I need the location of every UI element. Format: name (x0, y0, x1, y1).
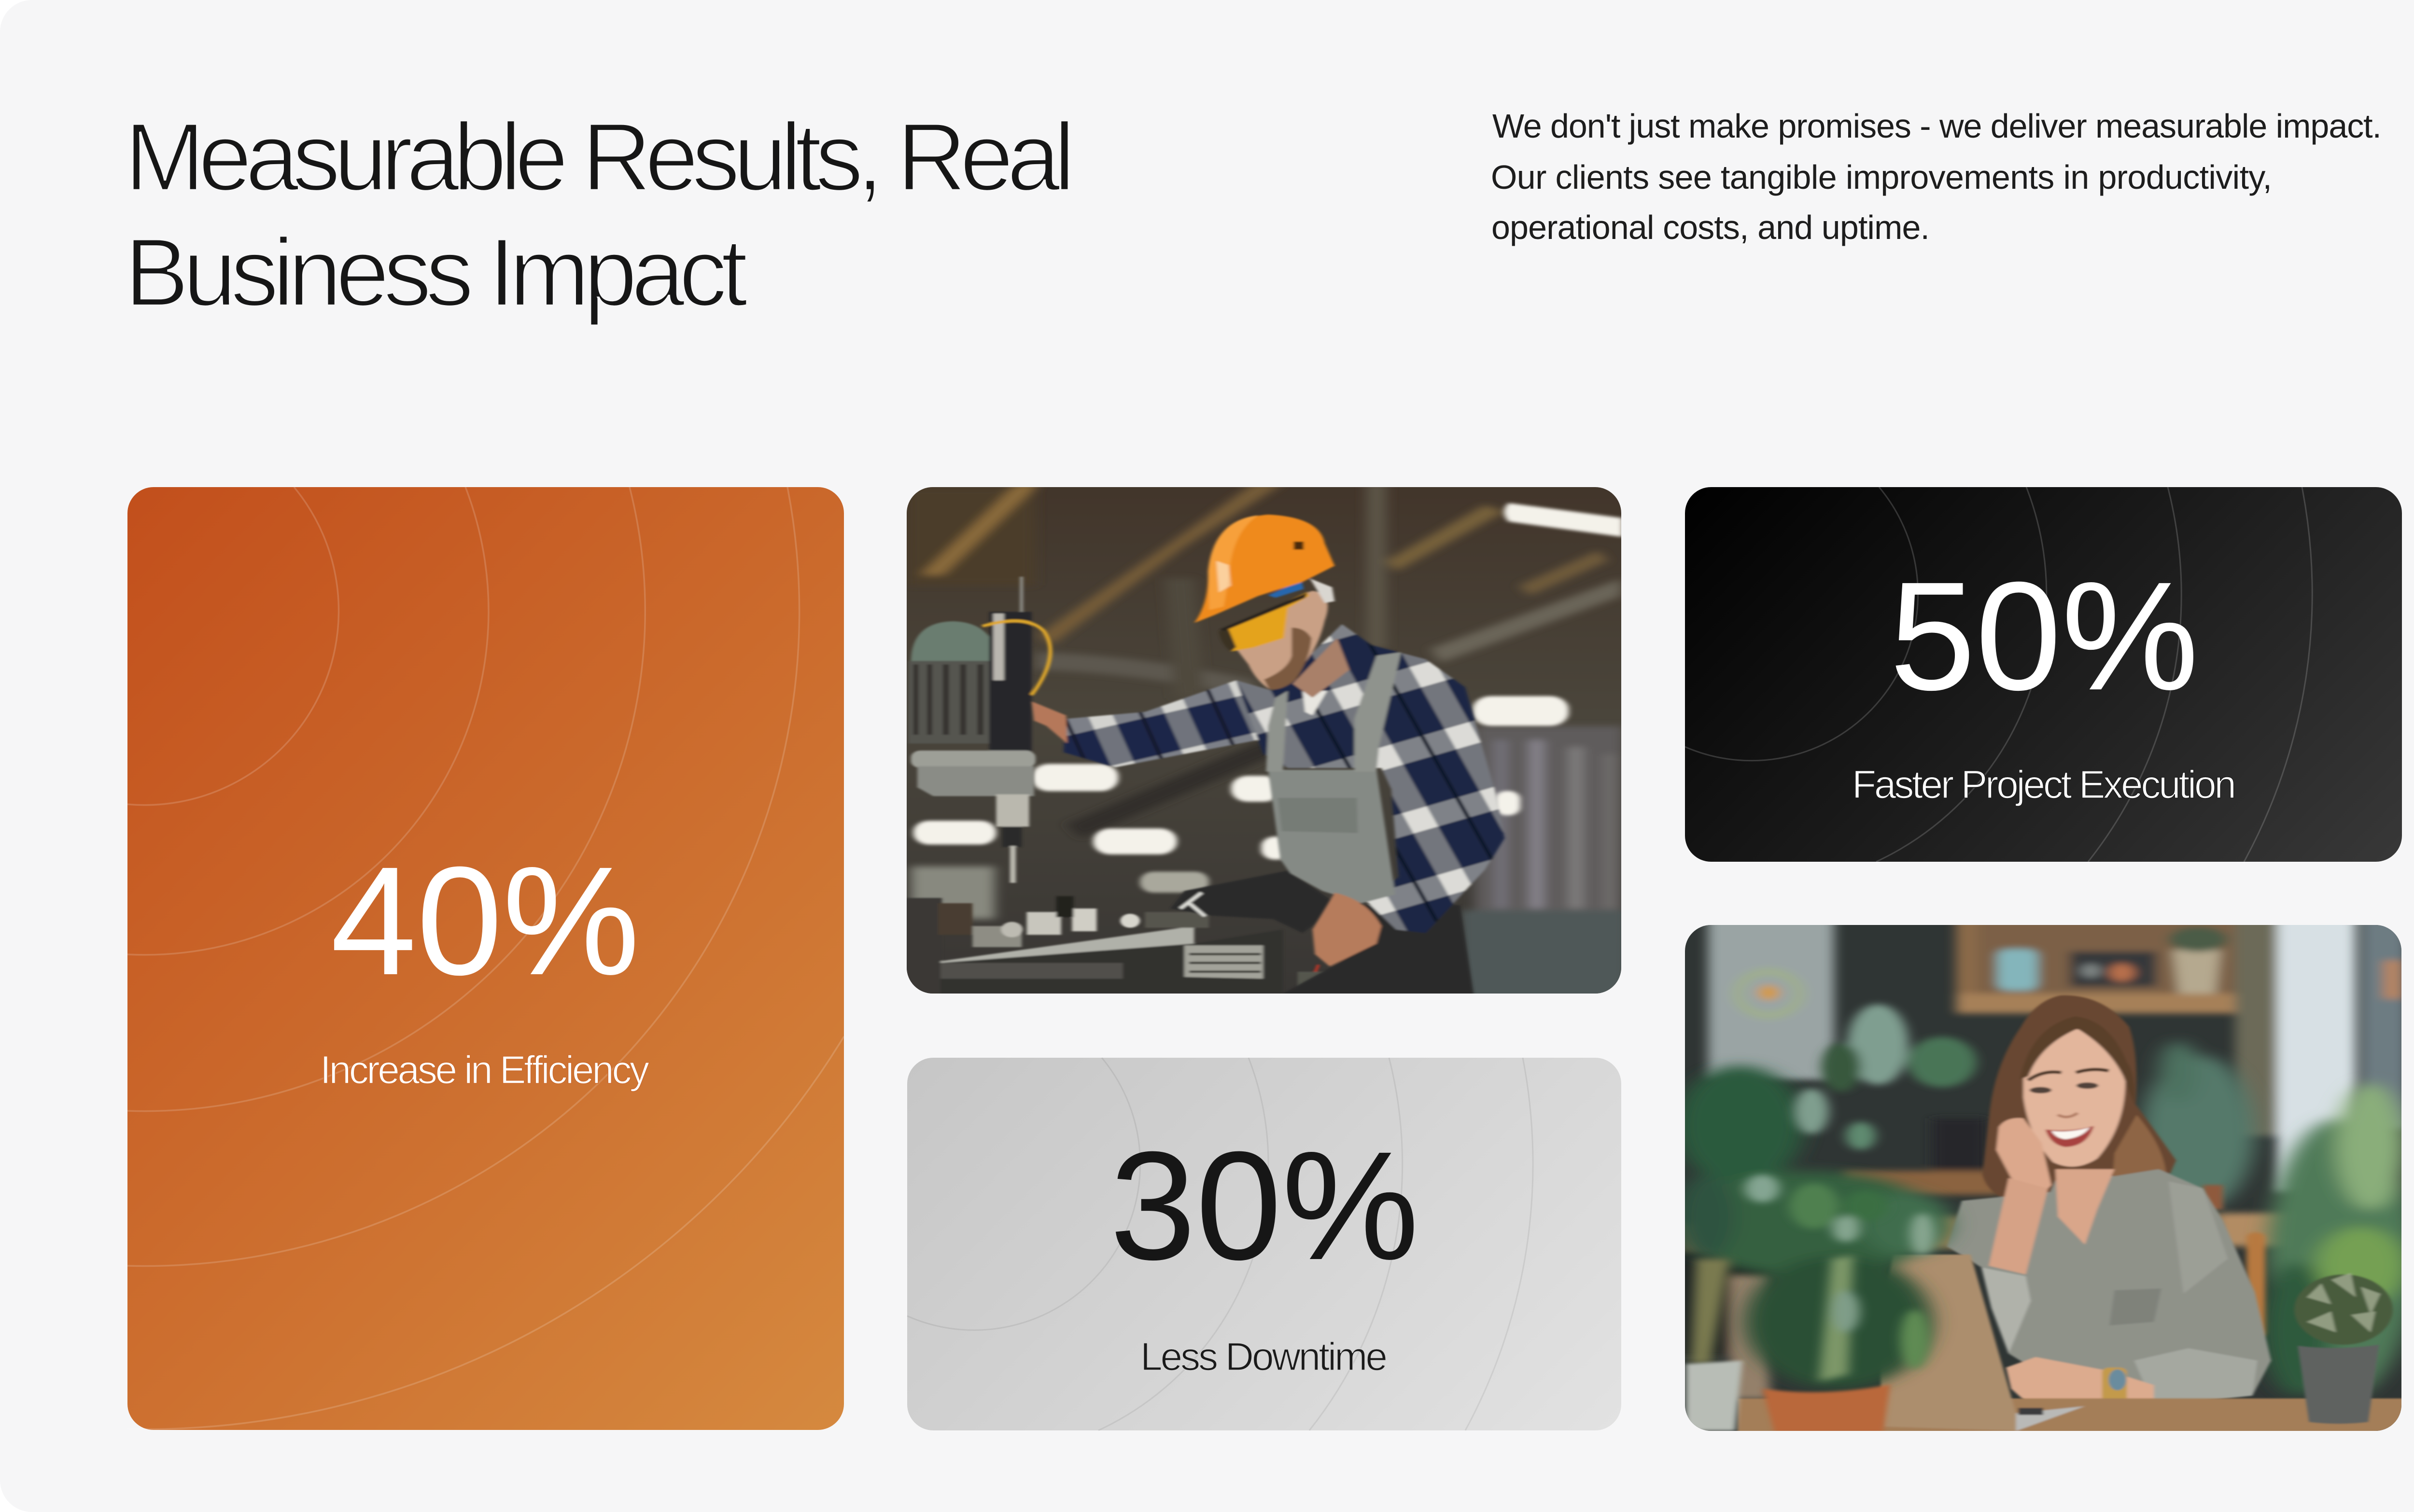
stat: 30%: 30% (1110, 1119, 1419, 1292)
title: Measurable Results, Real (125, 103, 1075, 211)
panel: factory worker photo (898, 480, 1633, 1000)
stat: 40%: 40% (331, 834, 640, 1007)
photo background: beams and lights (907, 484, 1628, 998)
photo: blurred background plants (2142, 1041, 2414, 1399)
intro paragraph: We don't just make promises - we deliver measurable impact. (1492, 107, 2382, 145)
intro paragraph: Our clients see tangible improvements in productivity, (1491, 158, 2272, 196)
photo: laptop (1738, 1255, 2408, 1433)
panel: smiling woman photo (1676, 918, 2414, 1438)
intro paragraph: operational costs, and uptime. (1491, 209, 1930, 246)
title (125, 103, 1075, 326)
photo: woman (1947, 995, 2271, 1407)
panel: 40% increase in efficiency (127, 487, 844, 1430)
label: less downtime: Less Downtime (1140, 1335, 1388, 1379)
label: increase in efficiency: Increase in Efficiency (320, 1048, 649, 1092)
photo: blurred foreground plants (1676, 1065, 1952, 1388)
photo: drill press machine (909, 577, 1050, 883)
photo: plant pots (1686, 1360, 1890, 1432)
label: faster project execution: Faster Project Execution (1852, 763, 2236, 807)
intro paragraph (1491, 107, 2382, 246)
panel: 30% less downtime (907, 1058, 1621, 1430)
stat: 50%: 50% (1890, 549, 2199, 722)
photo background: wall, shelf and window (1676, 918, 2406, 1399)
title: Business Impact (125, 219, 748, 326)
photo: worker (1032, 515, 1504, 996)
photo: machine bed (903, 870, 1345, 996)
panel: 50% faster project execution (1685, 487, 2402, 862)
